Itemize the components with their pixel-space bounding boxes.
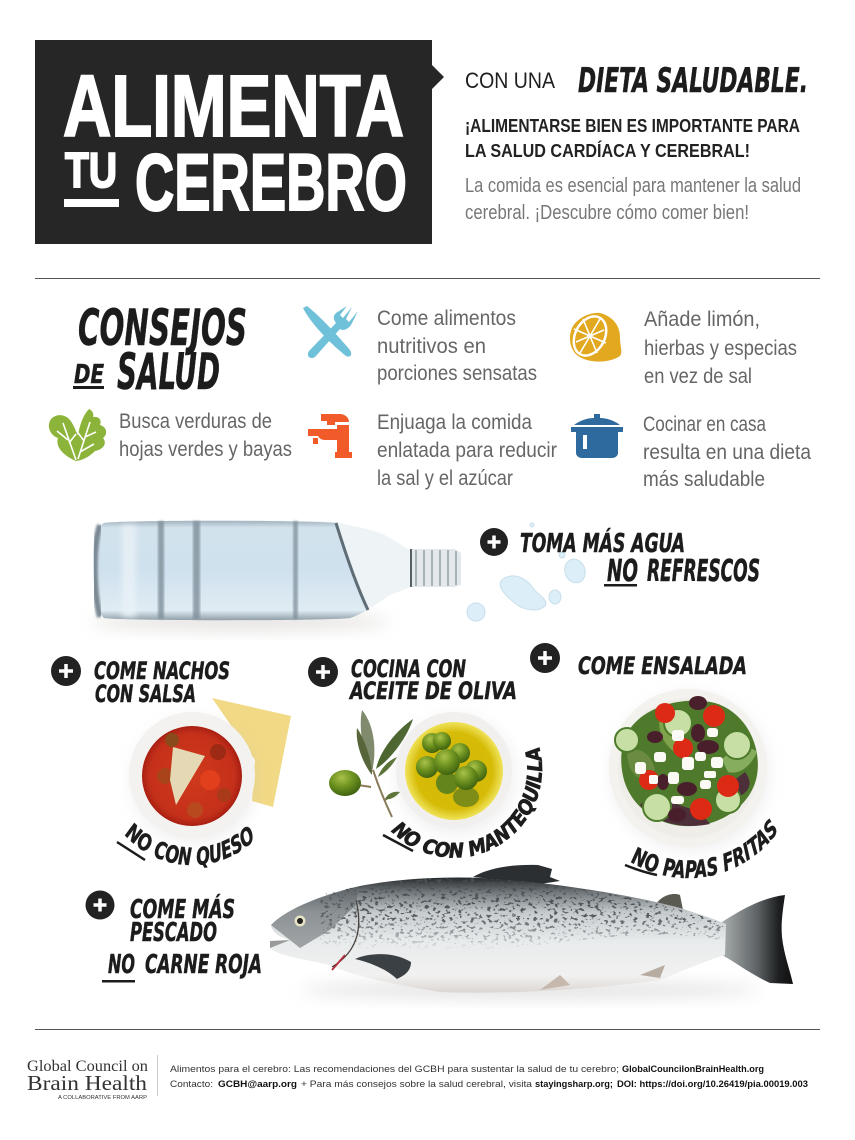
icon: leafy greens [49, 409, 106, 461]
label: come ensalada: COME ENSALADA [578, 652, 747, 680]
logo: global council on brain health: Brain Health [27, 1071, 148, 1095]
tip: verduras: Busca verduras de [119, 410, 272, 433]
subtitle: con una dieta saludable: CON UNA [465, 68, 555, 93]
heading: consejos de salud: DE [74, 360, 104, 390]
logo: global council on brain health: Global Council on [27, 1058, 148, 1075]
water bottle [90, 521, 461, 630]
label: cocina con aceite de oliva: COCINA CON [351, 655, 466, 683]
label: come más pescado no carne roja: CARNE ROJA [145, 950, 262, 980]
label: come más pescado no carne roja [102, 893, 262, 982]
footer credits: GlobalCouncilonBrainHealth.org [622, 1064, 764, 1075]
bold statement: LA SALUD CARDÍACA Y CEREBRAL! [465, 140, 750, 161]
tip: limón, hierbas y especias: hierbas y especias [644, 337, 797, 360]
plus icon: nachos [51, 656, 81, 686]
icon: lemon [566, 309, 621, 363]
footer credits: + Para más consejos sobre la salud cerebral, visita [301, 1079, 533, 1090]
tip: limón, hierbas y especias: Añade limón, [644, 308, 760, 331]
heading: consejos de salud: CONSEJOS [78, 299, 247, 357]
tip: alimentos nutritivos: nutritivos en [377, 335, 486, 358]
subtitle: con una dieta saludable [465, 61, 808, 101]
label: toma más agua no refrescos [520, 527, 760, 589]
title banner: ALIMENTA [63, 58, 404, 155]
tip: alimentos nutritivos: porciones sensatas [377, 362, 537, 385]
tip: cocinar en casa [643, 413, 811, 491]
tip: cocinar en casa: Cocinar en casa [643, 413, 766, 436]
label: toma más agua no refrescos: NO [607, 554, 638, 589]
label: come nachos con salsa: CON SALSA [95, 680, 196, 708]
tip: limón, hierbas y especias: en vez de sal [644, 365, 752, 388]
plus icon: agua [480, 528, 508, 556]
tip: alimentos nutritivos: Come alimentos [377, 307, 516, 330]
tip: limón, hierbas y especias [644, 308, 797, 388]
water droplets [467, 523, 589, 621]
logo: global council on brain health [27, 1058, 148, 1101]
intro text: cerebral. ¡Descubre cómo comer bien! [465, 202, 749, 224]
footer credits: Alimentos para el cerebro: Las recomendaciones del GCBH para sustentar la salud de tu cerebro; [170, 1064, 619, 1075]
label: no con queso: NO CON QUESO [124, 822, 253, 868]
icon: faucet [308, 414, 352, 458]
footer credits: DOI: https://doi.org/10.26419/pia.00019.003 [617, 1079, 808, 1090]
tip: enjuaga la comida: la sal y el azúcar [377, 467, 513, 490]
tip: enjuaga la comida: enlatada para reducir [377, 439, 557, 462]
tip: cocinar en casa: resulta en una dieta [643, 441, 811, 464]
title banner [35, 40, 444, 244]
footer credits [170, 1064, 808, 1090]
heading: consejos de salud: SALUD [117, 343, 220, 401]
label: cocina con aceite de oliva [348, 655, 517, 705]
logo: global council on brain health: A COLLABORATIVE FROM AARP [58, 1095, 147, 1101]
bold statement [465, 116, 800, 161]
label: come más pescado no carne roja: PESCADO [130, 918, 217, 948]
label: toma más agua no refrescos: REFRESCOS [647, 554, 760, 589]
plus icon: pescado [86, 890, 114, 920]
footer credits: Contacto: [170, 1079, 213, 1090]
olive branch [329, 710, 413, 817]
tip: alimentos nutritivos [377, 307, 537, 385]
plus icon: ensalada [530, 643, 560, 673]
label: come más pescado no carne roja: NO [108, 950, 135, 980]
label: toma más agua no refrescos: TOMA MÁS AGUA [520, 527, 685, 559]
salsa bowl with chips [129, 698, 291, 842]
intro text [465, 175, 801, 224]
footer credits: GCBH@aarp.org [218, 1079, 297, 1090]
label: cocina con aceite de oliva: ACEITE DE OLIVA [348, 677, 517, 705]
label: no papas fritas: NO PAPAS FRITAS [630, 818, 776, 878]
icon: cooking pot [571, 414, 623, 458]
plus icon: aceite [308, 657, 338, 687]
salad plate [609, 689, 768, 850]
tip: enjuaga la comida: Enjuaga la comida [377, 411, 532, 434]
label: no con mantequilla: NO CON MANTEQUILLA [390, 747, 542, 858]
icon: fork and knife [303, 306, 358, 358]
label: come nachos con salsa [94, 657, 230, 708]
bold statement: ¡ALIMENTARSE BIEN ES IMPORTANTE PARA [465, 116, 800, 136]
tip: enjuaga la comida [377, 411, 557, 490]
title banner: TU [65, 144, 117, 198]
tip: cocinar en casa: más saludable [643, 468, 765, 491]
olive oil bowl [396, 712, 514, 833]
label: come nachos con salsa: COME NACHOS [94, 657, 230, 685]
salmon fish [270, 865, 793, 998]
tip: verduras [119, 410, 292, 461]
label: come más pescado no carne roja: COME MÁS [130, 893, 235, 925]
footer credits: stayingsharp.org; [535, 1079, 613, 1090]
title banner: CEREBRO [135, 138, 407, 228]
tip: verduras: hojas verdes y bayas [119, 438, 292, 461]
heading: consejos de salud [73, 299, 247, 401]
